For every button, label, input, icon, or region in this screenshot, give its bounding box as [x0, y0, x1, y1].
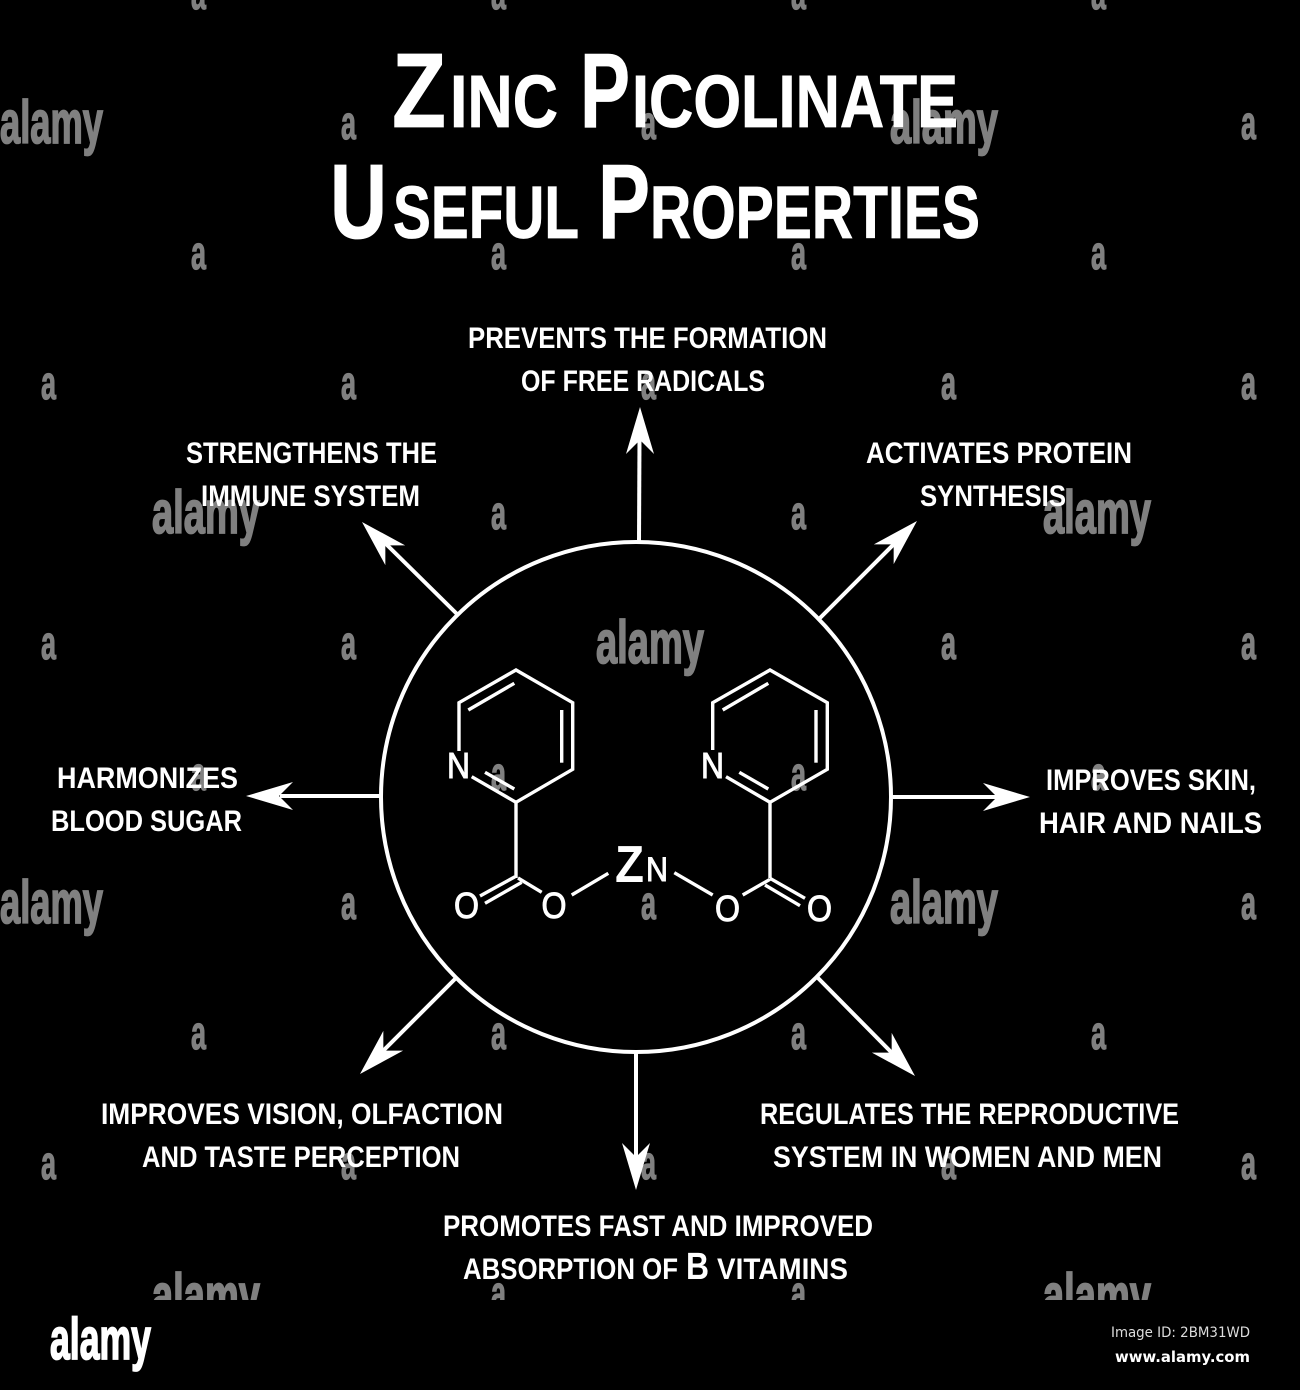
label: regulates reproductive system [760, 1098, 1179, 1174]
watermark pattern: alamy [152, 1262, 260, 1329]
title line 2 [330, 143, 980, 261]
watermark pattern: a [791, 1266, 806, 1319]
right pyridine ring [701, 670, 827, 802]
arrow: left [246, 782, 381, 810]
title line 1: ICOLINATE [632, 60, 958, 143]
label: activates protein synthesis [866, 437, 1132, 513]
title line 2: U [330, 143, 387, 261]
arrow: lower left [350, 977, 457, 1084]
watermark pattern: a [791, 486, 806, 539]
title [330, 32, 980, 261]
alamy logo: alamy [50, 1307, 151, 1372]
left carboxylate group: O [542, 885, 566, 926]
arrow: upper left [352, 512, 457, 614]
watermark pattern: a [1241, 876, 1256, 929]
left carboxylate group: O [454, 885, 479, 926]
watermark pattern: a [491, 226, 506, 279]
title line 1 [392, 32, 958, 150]
watermark pattern: a [41, 616, 56, 669]
watermark pattern: a [1241, 1136, 1256, 1189]
watermark pattern: a [1241, 96, 1256, 149]
watermark pattern: a [491, 486, 506, 539]
zinc atom: N [646, 851, 668, 889]
watermark pattern: alamy [1043, 1262, 1151, 1329]
watermark pattern: alamy [0, 869, 103, 936]
watermark pattern: a [191, 226, 206, 279]
watermark pattern: a [791, 1006, 806, 1059]
watermark pattern: a [641, 96, 656, 149]
label: improves vision olfaction taste: IMPROVES VISION, OLFACTION [101, 1098, 503, 1131]
zinc atom [572, 836, 713, 895]
title line 2: SEFUL [393, 171, 579, 254]
watermark pattern: a [1091, 747, 1106, 800]
label: harmonizes blood sugar: BLOOD SUGAR [51, 805, 242, 838]
watermark pattern: a [41, 356, 56, 409]
title line 2: ROPERTIES [650, 171, 980, 254]
arrow: lower right [818, 978, 925, 1086]
watermark pattern: a [1091, 226, 1106, 279]
watermark pattern: a [191, 747, 206, 800]
title line 1: INC [450, 60, 558, 143]
watermark pattern: a [41, 1136, 56, 1189]
watermark pattern: alamy [596, 609, 704, 676]
watermark pattern: a [1241, 356, 1256, 409]
label: promotes absorption of B vitamins [443, 1210, 873, 1288]
left pyridine ring [447, 670, 573, 802]
zinc atom: Z [615, 836, 644, 894]
watermark pattern: a [341, 356, 356, 409]
right carboxylate group [715, 802, 832, 929]
watermark pattern: alamy [890, 869, 998, 936]
watermark pattern: a [341, 96, 356, 149]
label: activates protein synthesis: ACTIVATES PROTEIN [866, 437, 1132, 470]
label: improves vision olfaction taste: AND TASTE PERCEPTION [142, 1141, 460, 1174]
title line 2: P [598, 143, 650, 261]
label: promotes absorption of B vitamins: ABSORPTION OF [463, 1253, 678, 1286]
arrow: down [622, 1053, 650, 1190]
image id and website: Image ID: 2BM31WD [1111, 1325, 1250, 1341]
label: promotes absorption of B vitamins: PROMOTES FAST AND IMPROVED [443, 1210, 873, 1243]
watermark pattern: a [1091, 1006, 1106, 1059]
label: regulates reproductive system: REGULATES THE REPRODUCTIVE [760, 1098, 1179, 1131]
watermark pattern: a [491, 747, 506, 800]
watermark pattern: a [341, 616, 356, 669]
watermark pattern: a [191, 1006, 206, 1059]
label: improves skin hair nails: IMPROVES SKIN, [1046, 764, 1256, 797]
title line 1: P [580, 32, 630, 150]
watermark pattern: a [341, 876, 356, 929]
watermark pattern: a [791, 226, 806, 279]
watermark pattern: a [641, 1136, 656, 1189]
label: prevents free radicals: OF FREE RADICALS [521, 365, 765, 398]
title line 1: Z [392, 32, 446, 150]
label: strengthens immune system: IMMUNE SYSTEM [201, 480, 420, 513]
central circle [381, 542, 891, 1052]
label: harmonizes blood sugar [51, 762, 242, 838]
label: regulates reproductive system: SYSTEM IN WOMEN AND MEN [773, 1141, 1162, 1174]
watermark pattern: a [491, 1006, 506, 1059]
label: strengthens immune system [186, 437, 437, 513]
label: promotes absorption of B vitamins: B [686, 1246, 709, 1288]
label: harmonizes blood sugar: HARMONIZES [57, 762, 238, 795]
right carboxylate group: O [807, 888, 832, 929]
label: prevents free radicals: PREVENTS THE FORMATION [468, 322, 827, 355]
watermark pattern: a [941, 616, 956, 669]
watermark pattern: alamy [0, 89, 103, 156]
watermark pattern: a [1241, 616, 1256, 669]
watermark pattern: a [491, 1266, 506, 1319]
right carboxylate group: O [715, 888, 740, 929]
image id and website: www.alamy.com [1115, 1348, 1250, 1366]
label: improves vision olfaction taste [101, 1098, 503, 1174]
label: improves skin hair nails: HAIR AND NAILS [1039, 807, 1262, 840]
watermark pattern: a [341, 1136, 356, 1189]
watermark pattern: a [641, 356, 656, 409]
watermark pattern: a [791, 747, 806, 800]
watermark pattern: a [941, 1136, 956, 1189]
left pyridine ring: N [447, 745, 470, 786]
arrow: up [626, 407, 654, 541]
label: promotes absorption of B vitamins: VITAMINS [717, 1253, 848, 1286]
watermark pattern: a [941, 356, 956, 409]
image id and website [1111, 1325, 1250, 1366]
watermark pattern: a [641, 876, 656, 929]
label: strengthens immune system: STRENGTHENS THE [186, 437, 437, 470]
arrow: right [892, 783, 1030, 811]
watermark pattern: alamy [1043, 479, 1151, 546]
watermark pattern: alamy [152, 479, 260, 546]
label: activates protein synthesis: SYNTHESIS [920, 480, 1066, 513]
label: prevents free radicals [468, 322, 827, 398]
zinc picolinate molecule [447, 670, 832, 929]
left carboxylate group [454, 802, 566, 926]
label: improves skin hair nails [1039, 764, 1262, 840]
right pyridine ring: N [701, 745, 724, 786]
arrow: upper right [820, 511, 927, 618]
watermark pattern: alamy [890, 89, 998, 156]
